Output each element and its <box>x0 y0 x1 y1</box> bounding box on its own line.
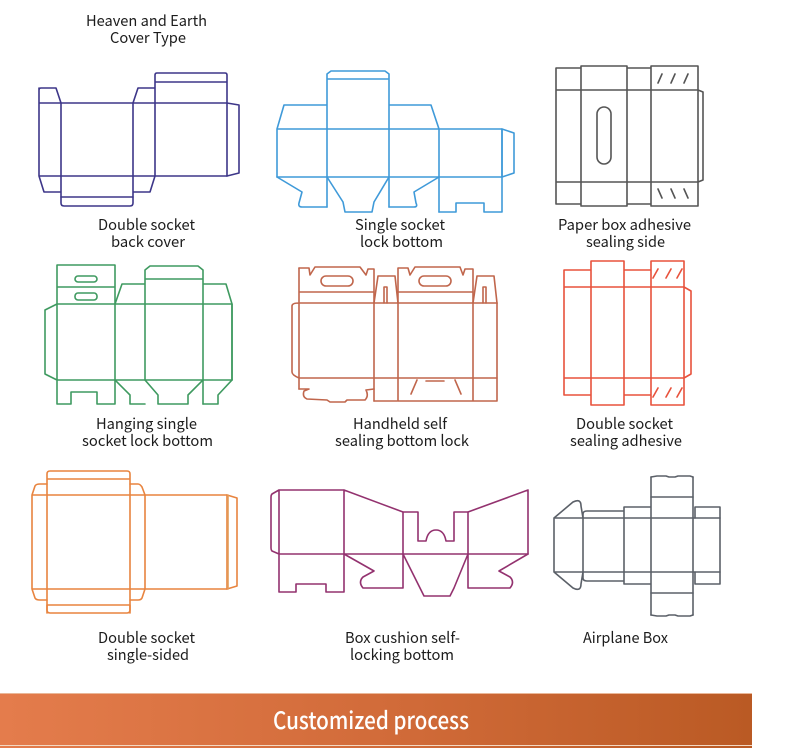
label: Single socket lock bottom: lock bottom <box>360 231 443 252</box>
label: Single socket lock bottom: Single socket <box>355 214 445 235</box>
label: Double socket sealing adhesive: sealing adhesive <box>570 430 682 451</box>
diagram: double socket single-sided <box>32 471 237 613</box>
diagram: double socket back cover <box>39 73 239 206</box>
label: Paper box adhesive sealing side <box>558 214 691 252</box>
label: Hanging single socket lock bottom <box>82 413 213 451</box>
label: Double socket back cover: back cover <box>111 231 185 252</box>
label: Double socket back cover: Double socket <box>98 214 195 235</box>
label: Heaven and Earth Cover Type: Heaven and Earth <box>86 10 207 31</box>
label: Double socket single-sided: Double socket <box>98 627 195 648</box>
banner: Customized process <box>0 693 752 748</box>
diagram: handheld self sealing bottom lock <box>292 267 497 402</box>
diagram: box cushion self-locking bottom <box>271 490 528 596</box>
label: Handheld self sealing bottom lock <box>335 413 470 451</box>
label: Box cushion self-locking bottom <box>345 627 460 665</box>
label: Double socket single-sided <box>98 627 195 665</box>
diagram: airplane box <box>554 476 720 616</box>
label: Double socket sealing adhesive: Double socket <box>576 413 673 434</box>
label: Double socket back cover <box>98 214 195 252</box>
diagram: hanging single socket lock bottom <box>45 265 232 404</box>
label: Box cushion self-locking bottom: locking bottom <box>350 644 454 665</box>
label: Heaven and Earth Cover Type: Cover Type <box>110 27 186 48</box>
label: Box cushion self-locking bottom: Box cushion self- <box>345 627 460 648</box>
label: Single socket lock bottom <box>355 214 445 252</box>
label: Paper box adhesive sealing side: sealing side <box>586 231 665 252</box>
label: Double socket sealing adhesive <box>570 413 682 451</box>
diagram: double socket sealing adhesive <box>564 261 691 405</box>
label: Airplane Box: Airplane Box <box>583 627 669 648</box>
label: Hanging single socket lock bottom: Hanging single <box>96 413 197 434</box>
label: Hanging single socket lock bottom: socket lock bottom <box>82 430 213 451</box>
banner: Customized process: Customized process <box>273 701 469 736</box>
diagram: single socket lock bottom <box>277 71 514 212</box>
label: Paper box adhesive sealing side: Paper box adhesive <box>558 214 691 235</box>
label: Handheld self sealing bottom lock: Handheld self <box>353 413 448 434</box>
label: Double socket single-sided: single-sided <box>107 644 189 665</box>
diagram: paper box adhesive sealing side <box>556 66 703 206</box>
label: Heaven and Earth Cover Type <box>86 10 207 48</box>
label: Handheld self sealing bottom lock: sealing bottom lock <box>335 430 470 451</box>
